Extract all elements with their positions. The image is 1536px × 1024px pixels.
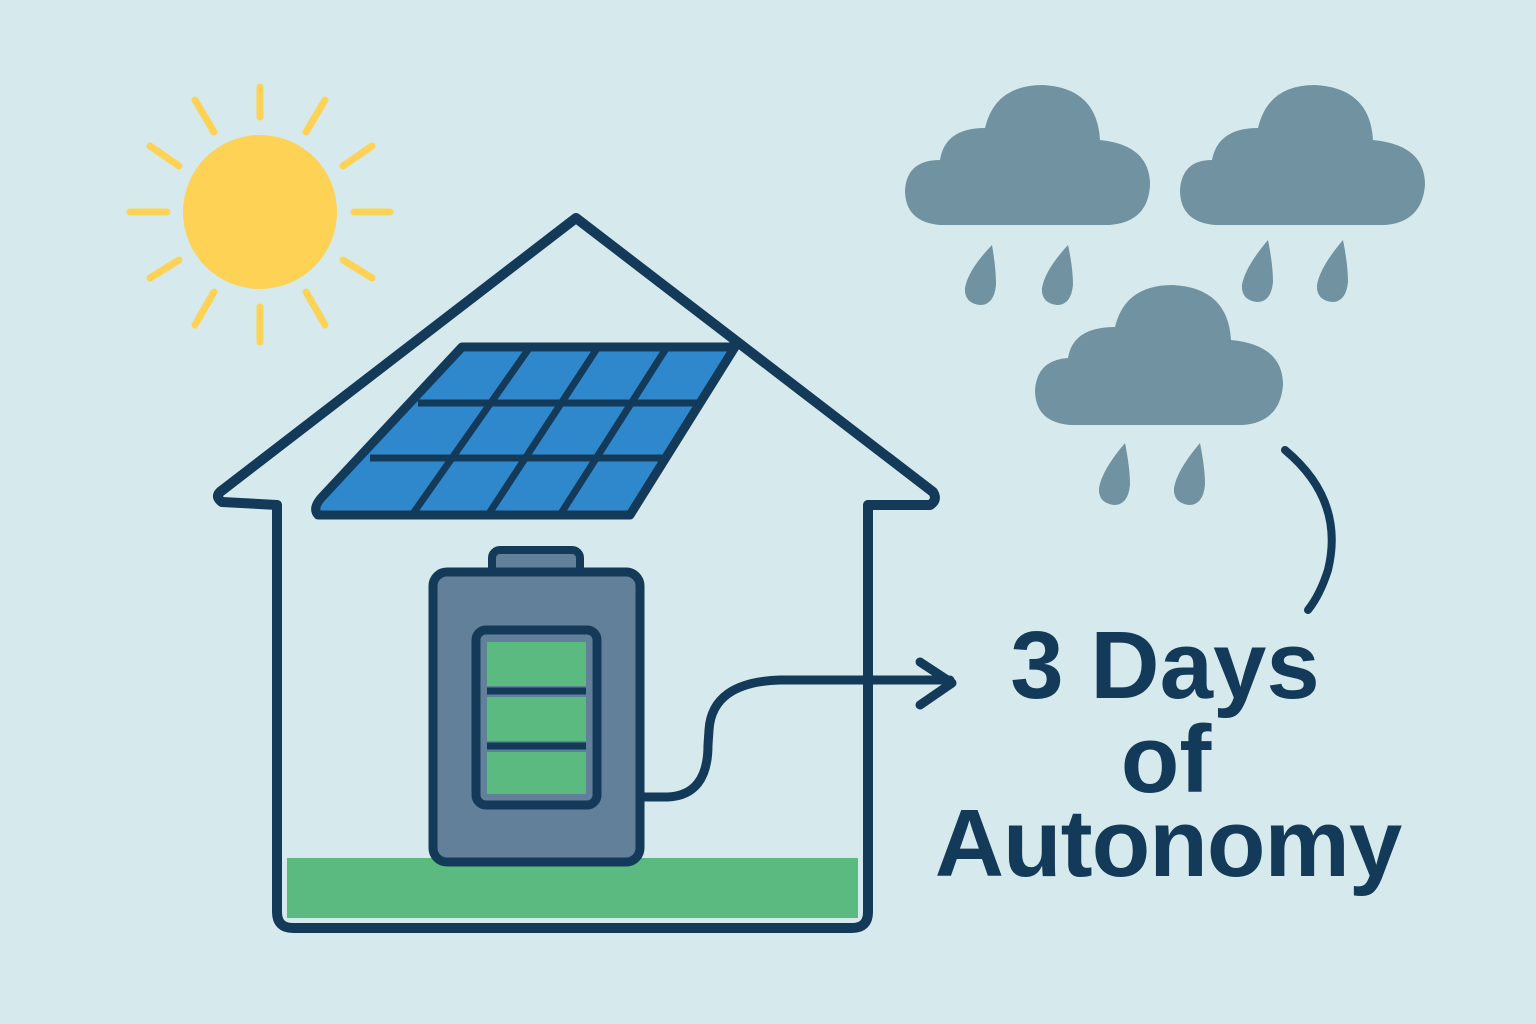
icon: rain cloud middle — [1035, 285, 1283, 505]
icon: sun — [130, 87, 390, 342]
title text: of — [1121, 706, 1212, 813]
title text: 3 Days — [1010, 612, 1320, 719]
arrow: cable from battery — [642, 662, 952, 797]
icon: rain cloud left — [905, 85, 1150, 305]
house — [218, 218, 935, 928]
solar panel — [316, 347, 735, 515]
title text — [935, 612, 1402, 897]
icon: rain cloud right — [1180, 85, 1425, 302]
arrow: curved line from clouds — [1285, 450, 1332, 610]
title text: Autonomy — [935, 790, 1402, 897]
battery — [433, 550, 640, 862]
